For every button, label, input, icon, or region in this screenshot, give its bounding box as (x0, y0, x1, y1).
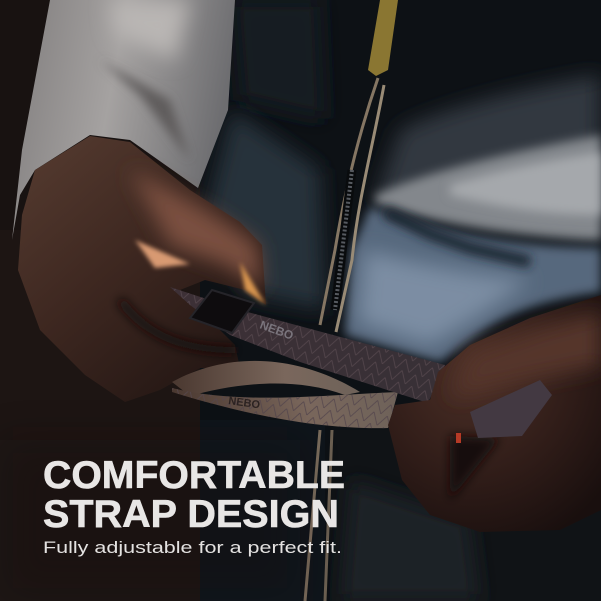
vest (200, 0, 601, 601)
strap logo lower: NEBO (228, 395, 261, 411)
strap buckle (190, 290, 254, 333)
zipper pull (368, 0, 398, 76)
strap logo upper: NEBO (258, 318, 295, 343)
upper strap (170, 287, 445, 403)
strap end held in right hand (470, 380, 552, 438)
vest lit area: upper quilted panel (375, 75, 601, 240)
headline (43, 454, 345, 536)
zipper (305, 78, 384, 601)
vest lit area: lower bluish panel (345, 207, 601, 362)
bottom shade (0, 440, 300, 601)
headline: COMFORTABLE (43, 454, 345, 497)
white sleeve (12, 0, 235, 240)
lower strap loops (172, 361, 398, 428)
left hand (18, 136, 266, 402)
subheading: Fully adjustable for a perfect fit. (43, 538, 342, 557)
right hand (388, 295, 601, 532)
headline: STRAP DESIGN (43, 493, 339, 536)
